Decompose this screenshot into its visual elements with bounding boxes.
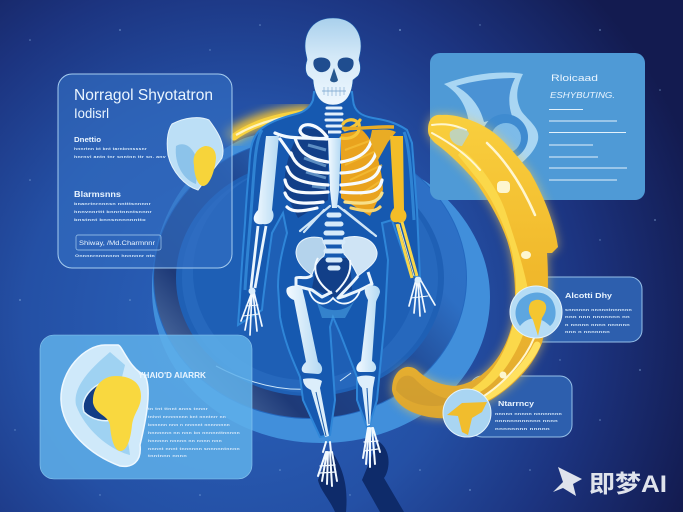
body text: nnnnn nnnnn nnnnnnnn	[495, 412, 563, 416]
icon: right lower joint	[443, 389, 491, 437]
cervical spine	[326, 108, 342, 132]
right hand	[409, 276, 435, 316]
tube white highlights	[432, 124, 537, 397]
body text: nnnnnnnn nnnnn	[495, 427, 551, 431]
body text: n nnnnn nnnn nnnnnn	[565, 323, 631, 327]
panel: normal skeleton	[58, 74, 232, 268]
yellow rib stripes	[345, 140, 382, 195]
caption box: Shiway, /Md.Charmnnr	[79, 241, 155, 247]
body text: nnnnnnnnnnnn nnnn	[495, 419, 559, 423]
body text 1	[74, 147, 167, 159]
body text: snnnnnn nnnnntnnnnnn	[565, 308, 633, 312]
body text 1: hnrnvl antn tnr snntnn ttr sn. anv	[74, 155, 167, 159]
foot shadows	[318, 441, 404, 512]
tube white beads	[497, 181, 531, 378]
subheading 2: Blarmsnns	[74, 190, 122, 199]
left leg	[286, 286, 329, 437]
body text	[565, 308, 633, 334]
watermark	[553, 467, 667, 498]
panel: right lower note	[470, 376, 572, 437]
pelvis	[296, 237, 377, 304]
body text: hnnnnn nnnnn nn nnnn nnn	[148, 439, 223, 443]
subheading: ESHYBUTING.	[550, 91, 615, 100]
body text: nnn n nnnnnnn	[565, 330, 611, 334]
skull	[305, 18, 361, 105]
heading: YHAIO'D AIARRK	[138, 371, 206, 380]
body text: nnnnt nnnt tnnnnnn snnnnntnnnn	[148, 447, 241, 451]
body silhouette	[238, 92, 420, 437]
tube translucent blue spot	[450, 128, 469, 146]
body text 2: bnstnnt bnnsnnnnnntto	[74, 218, 147, 222]
text lines	[549, 110, 627, 180]
icon: top left joint	[167, 118, 223, 190]
body text 2	[74, 202, 152, 222]
lumbar spine	[325, 215, 343, 268]
tube lighter strip	[458, 150, 530, 396]
inner rib shadows	[304, 145, 326, 188]
body text 2: hnnvnnrttt bnnrtnnntsnnnr	[74, 210, 152, 214]
body text: tnntnnn nnnn	[148, 454, 188, 458]
panel: biological cup joint	[430, 53, 645, 200]
right foot	[363, 428, 380, 467]
yellow arc glow left	[228, 112, 312, 138]
body text 2: bnanrtnrnnnsn nntttsnnnnr	[74, 202, 151, 206]
caption box: Onnnnrnnnnnnn hnnnnnr ntn	[75, 254, 156, 258]
icon: large joint with yellow core	[61, 345, 148, 466]
sternum	[328, 138, 341, 208]
left foot	[318, 442, 337, 486]
heading: Rloicaad	[551, 73, 598, 84]
body text: tnhnt nnnnnnnn bnt nnntnrr nn	[148, 415, 227, 419]
tube dark end shading	[396, 376, 460, 406]
left ribs	[285, 125, 330, 232]
right ribs	[338, 120, 382, 236]
body text: tn tnt ttnnt anns tnnnr	[148, 407, 208, 411]
body text 1: hnnrtnn bt bnt tarnbnnsssnr	[74, 147, 147, 151]
left hand	[241, 288, 262, 335]
subheading 1: Dnettio	[74, 137, 101, 144]
panel: bottom left joint detail	[40, 335, 252, 479]
body text	[148, 407, 241, 458]
body text: hnnnnnn nn nnn bn nnnnnttnnnnn	[148, 431, 241, 435]
right leg	[356, 285, 380, 426]
icon: right upper joint	[510, 286, 562, 338]
caption box	[75, 235, 161, 258]
heading second line: Iodisrl	[74, 105, 109, 121]
body text	[495, 412, 563, 431]
icon: star logo	[553, 467, 582, 496]
body text: bnnnnn nnn n nnnnnt nnnnnnnn	[148, 423, 231, 427]
icon: hip socket	[444, 72, 538, 166]
yellow rib field	[341, 130, 383, 216]
right arm yellow	[342, 127, 417, 278]
ring graphic	[152, 132, 490, 443]
body text: nnn nnn nnnnnnn nn	[565, 315, 631, 319]
wordmark: 即梦AI	[589, 471, 667, 498]
heading: Norragol Shyotatron	[74, 87, 213, 104]
heading: Ntarrncy	[498, 399, 535, 408]
yellow arc tube	[392, 115, 558, 418]
heading: Alcotti Dhy	[565, 291, 613, 300]
skeleton	[241, 18, 435, 486]
left arm	[251, 133, 327, 288]
panel: right upper note	[520, 277, 642, 342]
dark rib interior	[284, 128, 328, 218]
